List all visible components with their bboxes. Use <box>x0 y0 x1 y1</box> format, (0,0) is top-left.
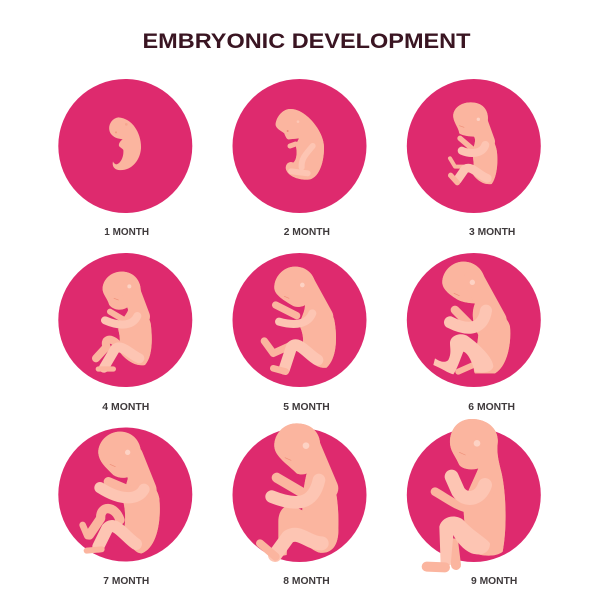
panel: 6 month <box>407 253 541 413</box>
label: 1 MONTH <box>104 226 149 238</box>
circle <box>58 79 192 213</box>
fetus <box>433 262 510 374</box>
panel: 4 month <box>58 253 192 413</box>
circle <box>232 253 366 387</box>
circle <box>407 253 541 387</box>
label: 3 MONTH <box>469 226 515 238</box>
panel: 2 month <box>232 79 366 238</box>
panel: 5 month <box>232 253 366 413</box>
circle <box>58 428 192 562</box>
fetus <box>427 419 506 567</box>
panel: 9 month <box>407 419 541 587</box>
fetus <box>260 423 338 557</box>
label: 5 MONTH <box>283 401 330 413</box>
fetus <box>276 109 324 180</box>
circle <box>407 79 541 213</box>
title: EMBRYONIC DEVELOPMENT <box>142 29 470 53</box>
fetus <box>96 272 152 369</box>
circle <box>407 428 541 562</box>
label: 4 MONTH <box>102 401 149 413</box>
panel: 7 month <box>58 428 192 587</box>
circle <box>58 253 192 387</box>
panel: 3 month <box>407 79 541 238</box>
circle <box>232 79 366 213</box>
circle <box>232 428 366 562</box>
label: 6 MONTH <box>468 401 515 413</box>
panel: 8 month <box>232 423 366 587</box>
label: 7 MONTH <box>103 575 149 587</box>
label: 8 MONTH <box>283 575 330 587</box>
panel: 1 month <box>58 79 192 238</box>
fetus <box>264 267 336 372</box>
label: 2 MONTH <box>284 226 330 238</box>
fetus <box>83 432 160 553</box>
fetus <box>109 117 141 170</box>
label: 9 MONTH <box>471 575 517 587</box>
fetus <box>450 102 497 184</box>
